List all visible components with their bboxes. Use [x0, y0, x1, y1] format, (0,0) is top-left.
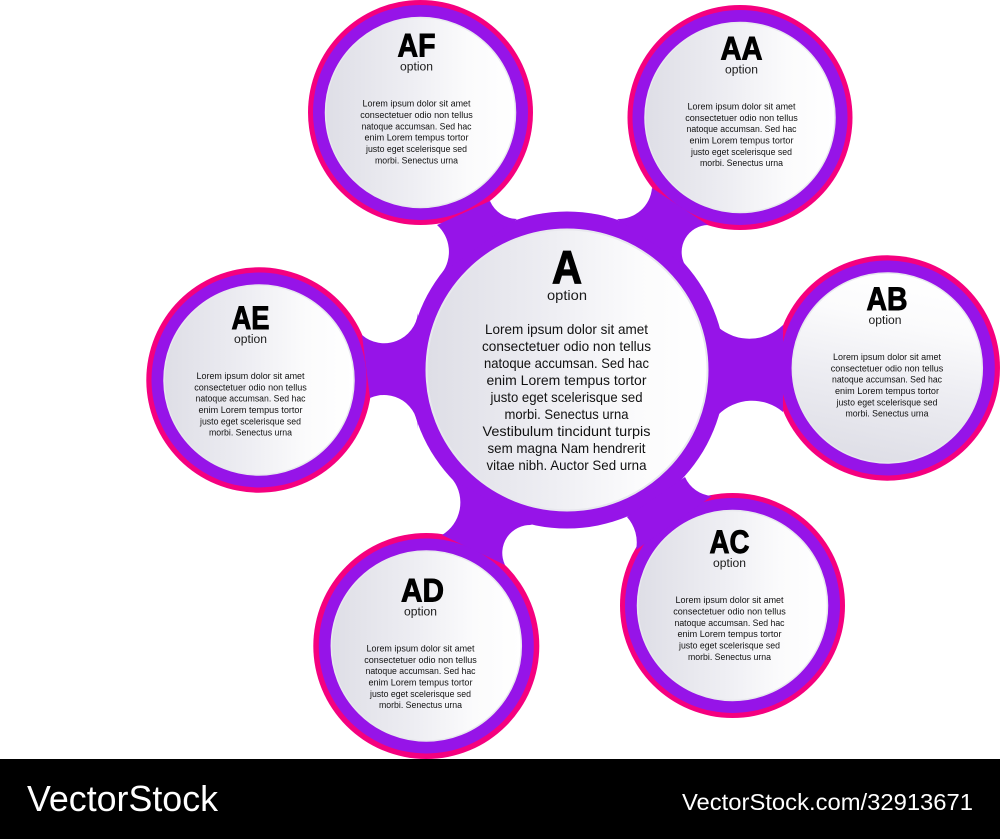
- panel: node AE: option: [234, 334, 267, 346]
- panel: node AA: natoque accumsan. Sed hac: [686, 124, 797, 134]
- footer band: VectorStock: [27, 778, 219, 819]
- panel: node AB: Lorem ipsum dolor sit amet: [833, 352, 941, 362]
- panel: node AA: AA: [720, 30, 762, 66]
- panel: node AD: justo eget scelerisque sed: [369, 689, 471, 699]
- panel: node AC: morbi. Senectus urna: [688, 652, 771, 662]
- panel: node AB: consectetuer odio non tellus: [831, 363, 944, 373]
- panel: node AB: AB: [866, 281, 908, 317]
- panel: node AC: [638, 510, 828, 700]
- panel: node AF: morbi. Senectus urna: [375, 155, 458, 165]
- panel: node AA: Lorem ipsum dolor sit amet: [688, 102, 796, 112]
- panel: node AF: justo eget scelerisque sed: [365, 144, 467, 154]
- panel: node AD: option: [404, 606, 437, 618]
- panel: node AE: [164, 285, 354, 475]
- panel: node AF: consectetuer odio non tellus: [360, 110, 473, 120]
- panel: node AE: consectetuer odio non tellus: [194, 382, 307, 392]
- panel: central node A: Vestibulum tincidunt turpis: [482, 423, 650, 439]
- panel: node AC: justo eget scelerisque sed: [678, 641, 780, 651]
- central ring and connectors: [362, 188, 783, 565]
- panel: node AB: enim Lorem tempus tortor: [835, 386, 939, 396]
- panel: node AE: natoque accumsan. Sed hac: [196, 394, 306, 404]
- panel: node AC: Lorem ipsum dolor sit amet: [676, 595, 784, 605]
- panel: node AA: [645, 22, 835, 212]
- panel: node AA: consectetuer odio non tellus: [685, 113, 798, 123]
- panel: node AA: enim Lorem tempus tortor: [690, 136, 794, 146]
- panel: node AD: natoque accumsan. Sed hac: [366, 666, 476, 676]
- panel: node AC: enim Lorem tempus tortor: [678, 629, 782, 639]
- panel: node AC: AC: [710, 524, 750, 560]
- panel: node AD: Lorem ipsum dolor sit amet: [366, 644, 475, 654]
- outer rings of the six option nodes: [146, 0, 1000, 759]
- panel: node AF: [326, 18, 516, 208]
- panel: central node A: justo eget scelerisque sed: [490, 389, 642, 405]
- panel: node AF: AF: [398, 28, 436, 64]
- panel: central node A: sem magna Nam hendrerit: [488, 440, 646, 456]
- panel: node AC: natoque accumsan. Sed hac: [674, 618, 785, 628]
- panel: node AE: justo eget scelerisque sed: [199, 416, 301, 426]
- panel: node AA: option: [725, 64, 758, 76]
- panel: central node A: A: [552, 241, 582, 293]
- panel: node AD: consectetuer odio non tellus: [364, 655, 477, 665]
- panel: node AA: justo eget scelerisque sed: [690, 147, 792, 157]
- panel: node AD: morbi. Senectus urna: [379, 700, 462, 710]
- panel: central node A: Lorem ipsum dolor sit amet: [485, 321, 648, 337]
- panel: node AC: consectetuer odio non tellus: [673, 607, 786, 617]
- panel: node AB: [792, 273, 982, 463]
- panel: node AD: AD: [401, 572, 444, 608]
- panel: central node A: vitae nibh. Auctor Sed urna: [486, 457, 647, 473]
- panel: central node A: [426, 230, 708, 510]
- footer band: [0, 759, 1000, 839]
- panel: node AF: Lorem ipsum dolor sit amet: [362, 99, 471, 109]
- panel: node AE: AE: [232, 300, 270, 336]
- panel: central node A: enim Lorem tempus tortor: [486, 372, 647, 388]
- panel: node AE: enim Lorem tempus tortor: [198, 405, 302, 415]
- panel: node AE: Lorem ipsum dolor sit amet: [196, 371, 305, 381]
- panel: central node A: natoque accumsan. Sed hac: [484, 355, 649, 371]
- panel: node AF: enim Lorem tempus tortor: [364, 133, 468, 143]
- panel: node AD: enim Lorem tempus tortor: [368, 678, 472, 688]
- panel: central node A: consectetuer odio non tellus: [482, 338, 651, 354]
- panel: node AF: natoque accumsan. Sed hac: [362, 121, 472, 131]
- panel: node AC: option: [713, 558, 746, 570]
- panel: node AE: morbi. Senectus urna: [209, 428, 292, 438]
- panel: node AB: option: [868, 315, 902, 327]
- footer band: VectorStock.com/32913671: [682, 789, 973, 815]
- panel: node AB: natoque accumsan. Sed hac: [832, 375, 942, 385]
- panel: node AF: option: [400, 62, 433, 74]
- panel: node AD: [331, 551, 521, 741]
- panel: central node A: option: [547, 287, 587, 303]
- panel: node AB: justo eget scelerisque sed: [836, 397, 938, 407]
- panel: node AA: morbi. Senectus urna: [700, 158, 783, 168]
- panel: central node A: morbi. Senectus urna: [504, 406, 629, 422]
- panel: node AB: morbi. Senectus urna: [846, 409, 928, 419]
